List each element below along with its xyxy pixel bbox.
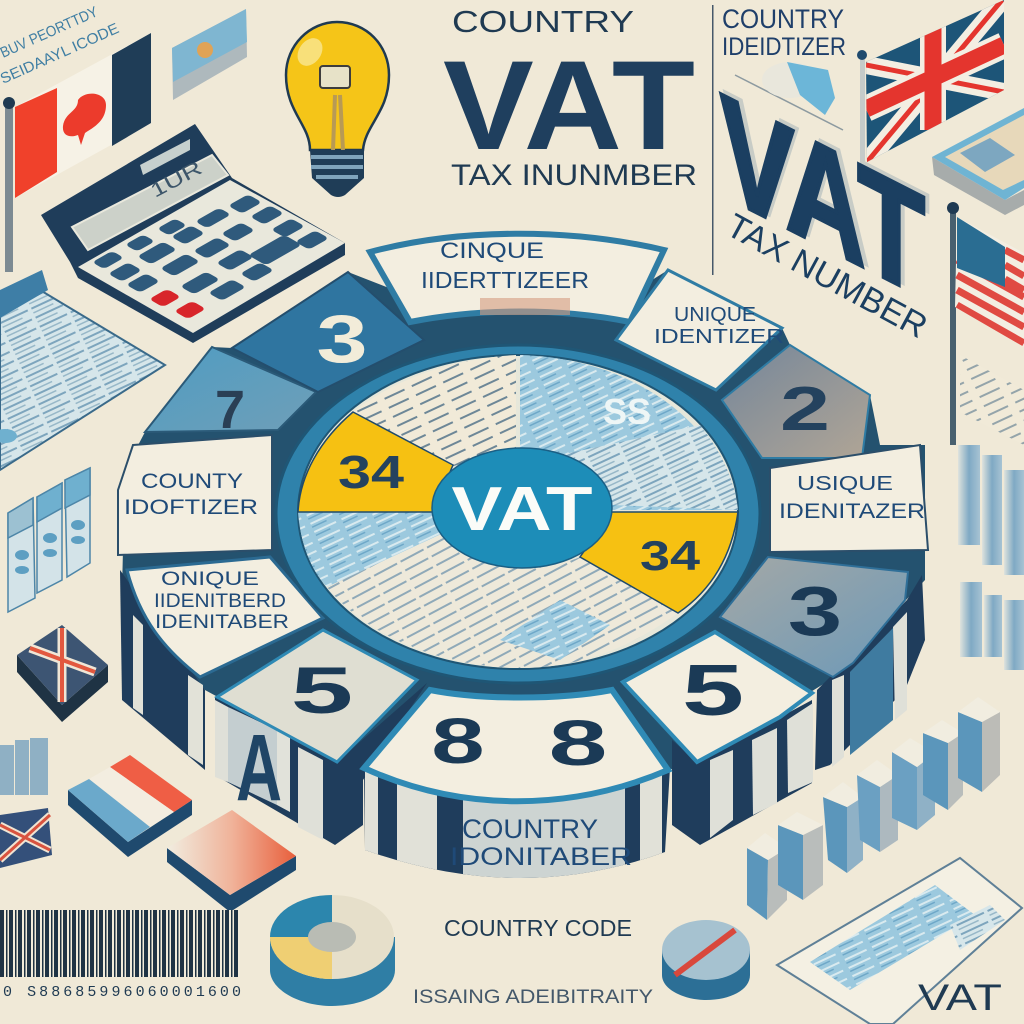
- flag: Netherlands block: [68, 755, 192, 857]
- centre badge: [432, 448, 612, 568]
- calculator: [41, 124, 345, 343]
- segment: unique identizer right: IDENITAZER: [779, 500, 925, 523]
- label: issuing authority: ISSAING ADEIBITRAITY: [413, 987, 653, 1008]
- flag: small UK corner: [0, 808, 52, 868]
- segment side: bottom centre: COUNTRY: [462, 814, 598, 844]
- segment: number 5 right: [623, 632, 812, 762]
- segment side: A block: A: [236, 715, 282, 821]
- segment: unique identifier left: ONIQUE: [161, 569, 259, 590]
- segment: unique identizer right: USIQUE: [797, 473, 893, 495]
- bar chart: isometric blocks: [747, 697, 1000, 920]
- segment: number 1: 7: [215, 380, 245, 440]
- segment: unique identifier left: IDENITABER: [155, 612, 289, 633]
- label: country code: COUNTRY CODE: [444, 915, 632, 941]
- diagram: VAT wheel: [118, 234, 928, 905]
- heading: angled VAT title: VAT: [724, 60, 929, 327]
- centre badge: VAT: [452, 475, 593, 544]
- segment: number 5 right: 5: [682, 650, 744, 730]
- segment: number 8: 8: [431, 706, 485, 777]
- flag: United Kingdom: [857, 0, 1004, 170]
- icon: no sign disc: [662, 920, 750, 1000]
- barcode digits: 0 S88685996060001600: [3, 984, 241, 1001]
- segment: number 8: [364, 690, 668, 801]
- pie: yellow wedge left: [298, 412, 453, 512]
- calculator: 1UR: [147, 157, 206, 202]
- ring: [276, 345, 760, 683]
- ring inner disc: [298, 355, 738, 669]
- segment: number 5 left: 5: [291, 653, 353, 727]
- document: right top card: [932, 108, 1024, 215]
- pie: document wedges: [298, 355, 738, 668]
- wheel dark under-base: [122, 270, 925, 770]
- bars: left small: [0, 738, 48, 795]
- segment side: left stripes: [120, 570, 205, 770]
- segment: country identizer: [118, 435, 272, 555]
- segment: number 3 top: 3: [316, 301, 368, 377]
- segment: number 8: 8: [549, 707, 607, 779]
- heading: left VAT title: TAX INUNMBER: [451, 159, 697, 192]
- segment: unique identizer right top: IDENTIZER: [654, 326, 784, 348]
- segment: number 3 top: [232, 272, 424, 392]
- segment: number 2: 2: [780, 375, 830, 444]
- segment: unique identizer right: [770, 445, 928, 552]
- segment: unique identifier left: IIDENITBERD: [154, 591, 286, 612]
- flag: Canada: [3, 33, 151, 272]
- calculator red keys: [149, 289, 206, 319]
- segment: number 3 right: [720, 557, 908, 677]
- calculator keys: [92, 194, 329, 301]
- small label: country identizer: COUNTRY: [722, 4, 844, 34]
- icon: light bulb: [286, 22, 389, 197]
- segment: unique identizer right top: [616, 270, 784, 390]
- segment: country identizer: COUNTY: [141, 470, 243, 493]
- divider column: [712, 5, 714, 275]
- flag: red block: [167, 810, 296, 912]
- segment: cinque identizer: IIDERTTIZEER: [421, 267, 589, 293]
- pie: SS label: SS: [603, 391, 651, 432]
- segment: unique identifier left: [127, 557, 323, 677]
- segment: unique identizer right top: UNIQUE: [674, 304, 756, 326]
- flag: United States: [947, 202, 1024, 445]
- icon: pie disc: [270, 895, 395, 1006]
- segment: cinque identizer: CINQUE: [440, 238, 544, 263]
- segment: cinque identizer: [370, 234, 664, 322]
- segment side: right 3: [815, 575, 925, 770]
- heading: left VAT title: COUNTRY: [452, 4, 634, 39]
- segment: number 3 right: 3: [788, 573, 842, 651]
- heading: left VAT title: [443, 4, 697, 192]
- segment: number 1: [145, 347, 316, 440]
- bar chart: right upper: [958, 445, 1024, 670]
- heading: left VAT title: VAT: [443, 34, 695, 176]
- icon: small blue device: [735, 62, 843, 130]
- segment side: bottom centre: IDONITABER: [450, 843, 632, 871]
- segment: number 5 left: [217, 630, 417, 762]
- heading: angled VAT title: TAX NUMBER: [720, 207, 933, 346]
- document: right side table: [960, 355, 1024, 445]
- pie: yellow wedge left: 34: [338, 446, 405, 498]
- segment: number 2: [722, 345, 870, 458]
- small label: country identizer: [722, 4, 846, 61]
- background notes: top-left text: SEIDAAYL ICODE: [0, 20, 122, 88]
- segment side: A block: [215, 683, 427, 845]
- segment: country identizer: IDOFTIZER: [124, 496, 258, 519]
- document: small top card: [172, 9, 247, 100]
- pie: yellow wedge right: [580, 512, 738, 613]
- segment side: right 5: [672, 700, 813, 845]
- document: VAT sheet: VAT: [918, 977, 1002, 1018]
- pie: yellow wedge right: 34: [640, 532, 701, 579]
- document: left table: [0, 270, 165, 470]
- document: VAT sheet: [777, 858, 1022, 1024]
- small label: country identizer: IDEIDTIZER: [722, 33, 846, 61]
- barcode: [0, 910, 240, 977]
- heading: angled VAT title: VAT: [720, 62, 925, 329]
- segment side: bottom centre: [364, 772, 670, 878]
- document: left cards: [8, 468, 90, 612]
- flag: small UK left: [17, 625, 108, 722]
